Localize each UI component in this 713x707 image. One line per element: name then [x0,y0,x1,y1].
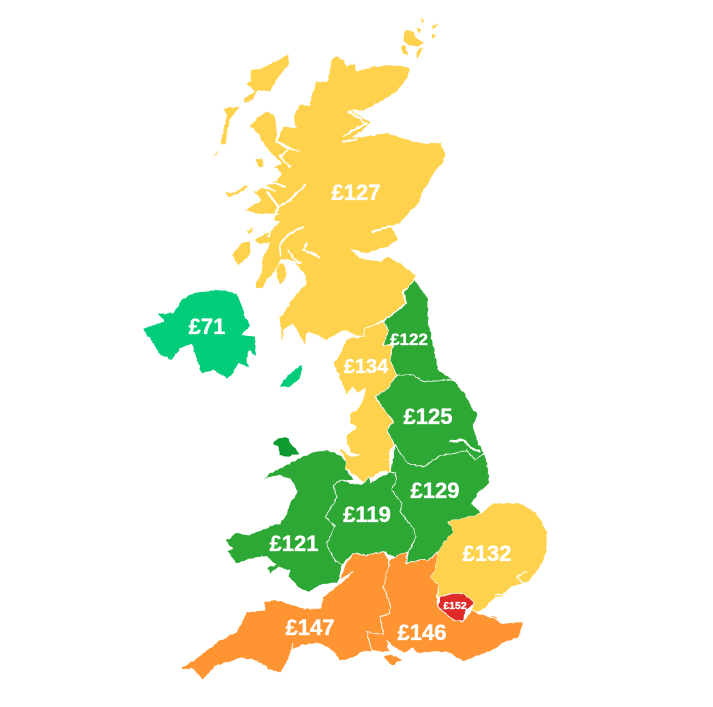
island: Arran [277,263,286,283]
island: Uist [221,107,240,145]
sea lochs and firths [262,112,392,263]
label: Northern Ireland: £71 [189,314,225,339]
island: Anglesey [273,437,300,457]
islands: Orkney [400,17,440,60]
island: Lewis and Harris [243,55,288,103]
southern regions [182,445,547,680]
region: North East England [383,280,453,382]
label: Scotland: £127 [332,180,380,205]
region: Yorkshire and the Humber [375,375,485,467]
island: Islay [232,242,250,265]
island: Isle of Man [280,366,302,387]
island: Isle of Wight [383,654,402,666]
island: Tiree and Coll [226,183,248,197]
label: West Midlands: £119 [343,502,391,527]
value labels [189,180,511,645]
label: Wales: £121 [270,531,318,556]
region: Northern Ireland [143,290,256,378]
northern regions [143,280,485,483]
label: East Midlands: £129 [411,478,459,503]
region: East Midlands [390,445,490,563]
label: East of England: £132 [463,541,511,566]
Humber estuary [449,440,480,452]
region: South West England [182,552,390,680]
region: London [438,593,475,622]
label: South East: £146 [398,620,446,645]
Scotland mainland [247,57,446,345]
region: West Midlands [325,472,417,565]
label: North West: £134 [344,356,389,378]
region: Scotland [212,17,446,345]
label: London: £152 [443,600,467,612]
label: Yorkshire: £125 [404,404,452,429]
region: North West England [333,322,397,483]
estuaries [482,572,527,620]
region: South East England [367,552,523,662]
region: Wales [226,450,353,592]
label: South West: £147 [286,615,334,640]
map of the UK regions [143,17,547,680]
island: Barra [212,150,218,157]
region: East of England [430,503,547,612]
label: North East: £122 [390,330,428,349]
island: Colonsay [247,227,253,234]
island: Skye fragment [255,158,263,167]
